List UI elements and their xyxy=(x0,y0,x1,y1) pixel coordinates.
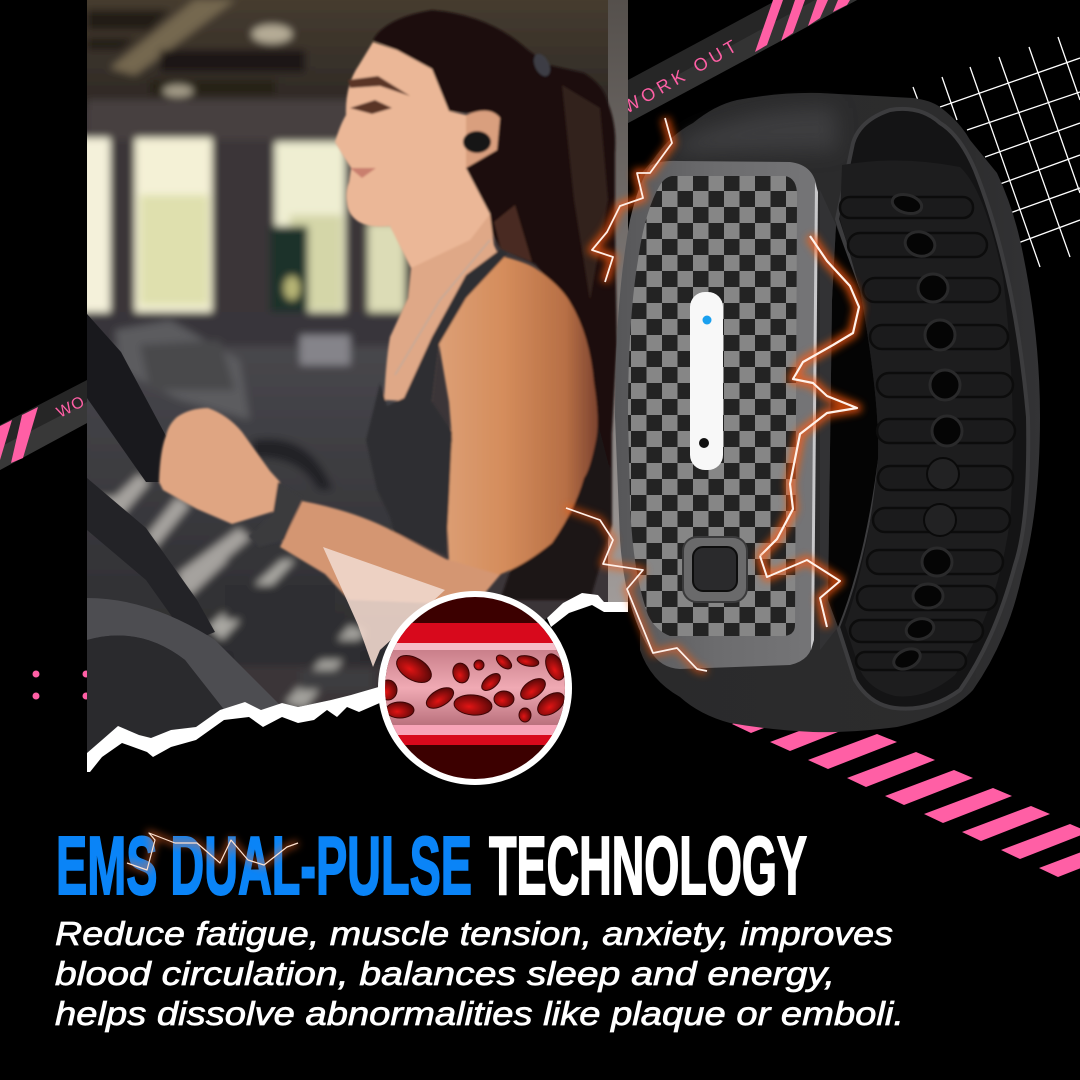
description text: helps dissolve abnormalities like plaque or emboli. xyxy=(55,995,904,1032)
inner strap surface xyxy=(837,109,1028,709)
ponytail and hair xyxy=(373,10,617,470)
top workout ribbon xyxy=(619,0,857,123)
case highlight xyxy=(811,182,818,650)
mini bracelet xyxy=(249,482,302,547)
right grey wall strip xyxy=(608,0,628,610)
blood vessel magnifier xyxy=(378,590,572,790)
lower treadmill shadow xyxy=(87,636,224,753)
side sheen xyxy=(820,190,838,650)
square button xyxy=(683,537,747,602)
checkerboard panel xyxy=(625,170,805,645)
lightning: right of device xyxy=(760,236,859,556)
left workout ribbon: WO xyxy=(54,393,88,422)
title: blue part: EMS DUAL-PULSE xyxy=(56,819,472,912)
treadmill rail xyxy=(87,478,215,642)
red blood cells xyxy=(379,650,568,722)
sports bra xyxy=(366,249,508,555)
face xyxy=(335,42,490,268)
inner strap plateau xyxy=(840,160,1013,697)
description text xyxy=(55,915,904,1032)
dark gap between case and strap xyxy=(828,225,878,627)
white light bar xyxy=(690,292,723,470)
left workout ribbon xyxy=(0,380,88,470)
black indicator xyxy=(699,438,709,448)
ear xyxy=(466,111,500,168)
forearm xyxy=(280,501,500,605)
lips xyxy=(350,168,376,178)
blue indicator xyxy=(702,316,712,324)
title: white part: TECHNOLOGY xyxy=(489,819,807,912)
neck and chest xyxy=(384,214,501,402)
zoom cone from arm to magnifier xyxy=(323,547,445,667)
lightning: bottom left of device xyxy=(566,508,707,671)
description text: blood circulation, balances sleep and energy, xyxy=(55,955,835,992)
strap top sheen xyxy=(670,108,838,155)
ponytail highlight xyxy=(562,85,608,300)
strap buttons xyxy=(924,458,959,536)
white grid xyxy=(913,37,1080,267)
lightning: top left of device xyxy=(592,118,672,282)
outer strap xyxy=(640,93,1040,732)
pulse wave line xyxy=(87,593,628,772)
title lightning spark xyxy=(127,833,298,870)
woman figure xyxy=(159,10,617,605)
pink dots xyxy=(32,670,90,700)
earbud xyxy=(463,131,491,153)
strap ribs xyxy=(840,197,1015,670)
gym background xyxy=(87,0,608,734)
metal case frame xyxy=(615,161,817,669)
back of bra and torso shadow xyxy=(501,424,614,601)
description text: Reduce fatigue, muscle tension, anxiety, improves xyxy=(55,915,893,952)
treadmill console xyxy=(87,314,166,482)
fist xyxy=(159,408,280,524)
lower hair highlight xyxy=(494,205,532,262)
wristband device xyxy=(615,93,1040,732)
top workout ribbon: WORK OUT xyxy=(619,36,740,117)
photo: woman running on treadmill xyxy=(87,0,628,753)
pink diagonal stripes xyxy=(693,680,1080,877)
strap holes xyxy=(890,191,962,673)
lightning: lower right of device xyxy=(760,556,840,627)
hair scrunchie xyxy=(532,54,552,78)
necklace xyxy=(395,240,490,375)
bare shoulder and upper arm xyxy=(439,256,598,600)
treadmill handle xyxy=(87,598,279,710)
eyebrow, eye and lips xyxy=(348,76,410,114)
